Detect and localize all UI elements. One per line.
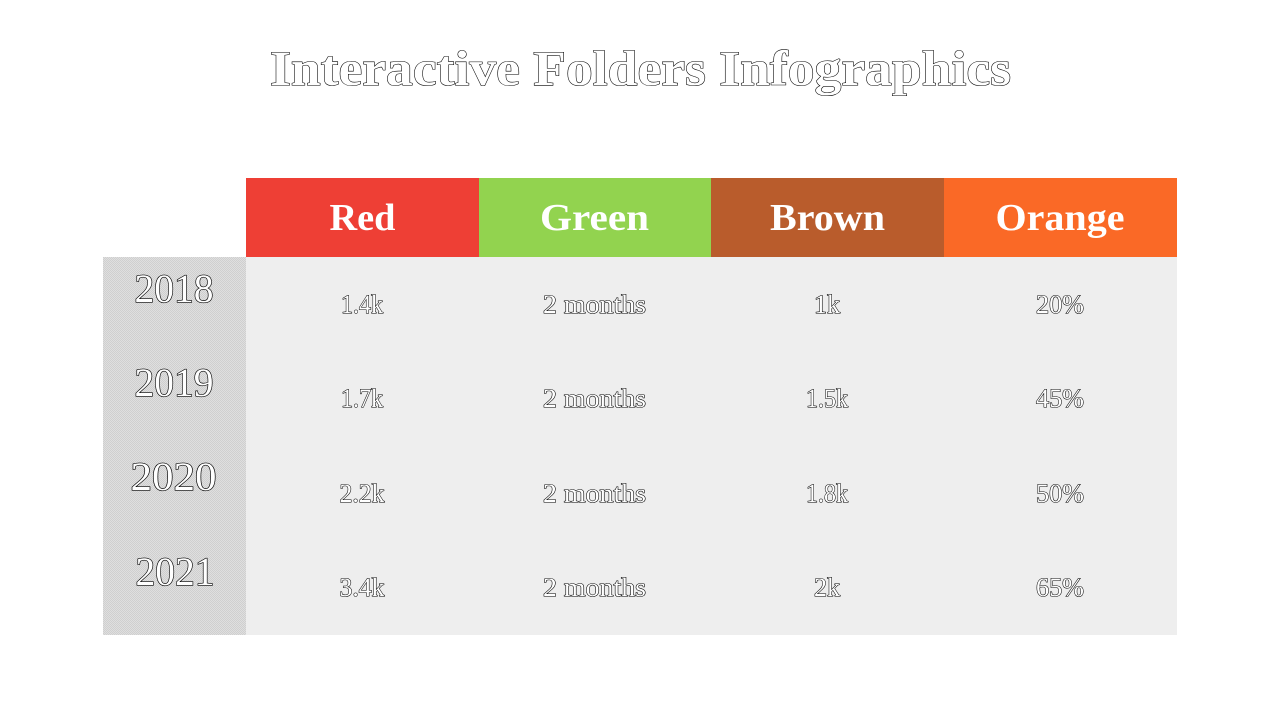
column values: Green: 2 months (543, 290, 646, 319)
column values: Red: 1.7k (341, 384, 383, 413)
header: Green: Green (540, 197, 649, 239)
column values: Brown: 2k (814, 573, 840, 602)
column values: Orange: 45% (1036, 384, 1084, 413)
header: Brown: Brown (770, 197, 885, 239)
header: Red: Red (330, 197, 396, 239)
column values: Brown: 1.5k (806, 384, 848, 413)
column values: Orange: 20% (1036, 290, 1084, 319)
column values: Red: 1.4k (341, 290, 383, 319)
column values: Red: 2.2k (340, 479, 384, 508)
header: Red (246, 178, 479, 257)
header: Orange (944, 178, 1177, 257)
row labels: years: 2019 (134, 360, 214, 405)
header: Green (479, 178, 711, 257)
column values: Brown: 1k (814, 290, 840, 319)
column values: Red (340, 290, 384, 602)
column values: Brown: 1.8k (806, 479, 848, 508)
panel: year column background (103, 257, 246, 635)
header: Brown (711, 178, 944, 257)
column values: Orange: 50% (1036, 479, 1084, 508)
row labels: years: 2021 (136, 549, 214, 594)
header: Orange: Orange (996, 197, 1124, 239)
title: Interactive Folders Infographics (270, 40, 1011, 96)
column values: Red: 3.4k (340, 573, 384, 602)
row labels: years: 2018 (134, 266, 214, 311)
column values: Green (543, 290, 646, 602)
row labels: years: 2020 (130, 454, 216, 499)
row labels: years (130, 266, 216, 594)
table (103, 178, 1177, 635)
column values: Green: 2 months (543, 479, 646, 508)
panel: table body background (246, 257, 1177, 635)
column values: Green: 2 months (543, 573, 646, 602)
column values: Brown (806, 290, 848, 602)
column values: Green: 2 months (543, 384, 646, 413)
column values: Orange: 65% (1036, 573, 1084, 602)
column values: Orange (1036, 290, 1084, 602)
